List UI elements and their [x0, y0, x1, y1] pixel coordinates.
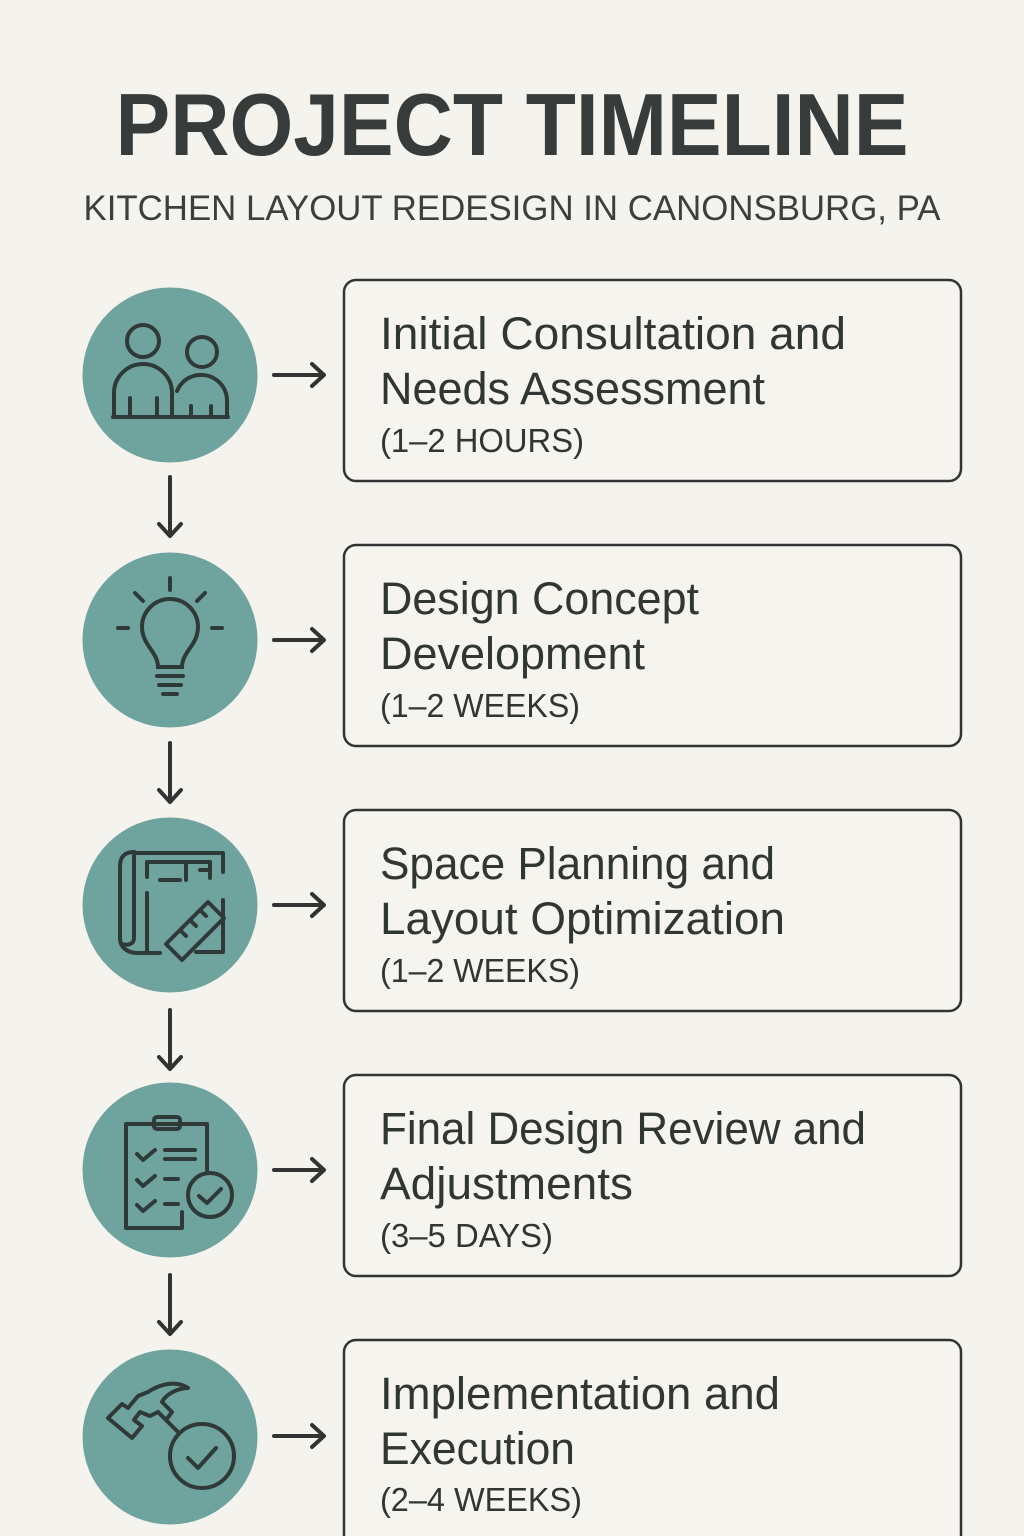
- step 3: space planning: [82, 810, 961, 1011]
- box: Design Concept: [380, 573, 699, 624]
- step 4: final review: [82, 1075, 961, 1276]
- icon: people: [82, 288, 258, 462]
- box: (1–2 WEEKS): [380, 687, 580, 724]
- title: PROJECT TIMELINE: [116, 75, 908, 174]
- box: [344, 280, 961, 481]
- box: Development: [380, 628, 645, 679]
- icon: hammer and check: [82, 1350, 258, 1524]
- box: [344, 545, 961, 746]
- step 5: implementation: [82, 1340, 961, 1536]
- box: (3–5 DAYS): [380, 1217, 553, 1254]
- box: [344, 1340, 961, 1536]
- box: Layout Optimization: [380, 893, 785, 944]
- step 1: consultation: [82, 280, 961, 481]
- arrow down 1: [159, 477, 181, 536]
- box: Execution: [380, 1423, 575, 1474]
- box: Initial Consultation and: [380, 308, 846, 359]
- box: [344, 1075, 961, 1276]
- box: (1–2 HOURS): [380, 422, 584, 459]
- box: (1–2 WEEKS): [380, 952, 580, 989]
- icon: clipboard checklist: [82, 1082, 258, 1258]
- arrow right: [274, 1425, 324, 1447]
- box: Final Design Review and: [380, 1103, 866, 1154]
- icon: lightbulb: [82, 552, 258, 728]
- box: (2–4 WEEKS): [380, 1481, 582, 1518]
- arrow down 3: [159, 1010, 181, 1069]
- icon: blueprint and ruler: [82, 818, 258, 992]
- arrow right: [274, 364, 324, 386]
- box: Space Planning and: [380, 838, 775, 889]
- arrow right: [274, 629, 324, 651]
- arrow right: [274, 1159, 324, 1181]
- box: [344, 810, 961, 1011]
- step 2: design concept: [82, 545, 961, 746]
- box: Adjustments: [380, 1158, 633, 1209]
- arrow right: [274, 894, 324, 916]
- arrow down 2: [159, 743, 181, 802]
- subtitle: KITCHEN LAYOUT REDESIGN IN CANONSBURG, PA: [84, 189, 941, 228]
- arrow down 4: [159, 1275, 181, 1334]
- box: Needs Assessment: [380, 363, 765, 414]
- box: Implementation and: [380, 1368, 780, 1419]
